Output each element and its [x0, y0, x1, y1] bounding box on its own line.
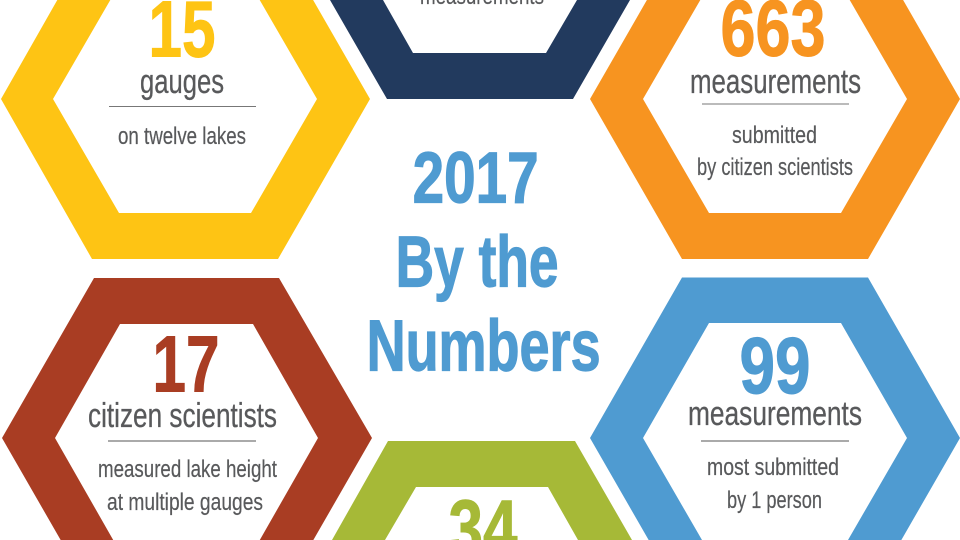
description: most submitted by 1 person: most submitted	[707, 454, 839, 481]
hexagon ring: blue	[590, 278, 960, 540]
title: 2017 By the Numbers	[367, 138, 601, 386]
divider line	[108, 440, 256, 442]
panel: gauges hexagon	[1, 0, 370, 259]
hexagon ring: brown	[2, 278, 372, 540]
title: 2017 By the Numbers: Numbers	[367, 306, 601, 386]
unit: measurements: measurements	[690, 63, 861, 101]
description: submitted by citizen scientists	[697, 122, 853, 181]
panel: citizen scientists hexagon	[2, 278, 372, 540]
number: 99: 99	[740, 321, 810, 410]
description: measured lake height at multiple gauges: measured lake height	[98, 456, 277, 483]
description: measured lake height at multiple gauges: at multiple gauges	[107, 489, 263, 516]
divider line	[109, 106, 256, 107]
panel: navy hexagon (cropped)	[330, 0, 630, 99]
hexagon ring: orange	[590, 0, 960, 259]
unit: gauges: gauges	[140, 63, 224, 101]
divider line	[701, 440, 849, 442]
description: submitted by citizen scientists: submitted	[732, 122, 817, 149]
hexagon ring: green	[332, 441, 632, 540]
unit: citizen scientists: citizen scientists	[88, 397, 277, 435]
description: on twelve lakes: on twelve lakes	[118, 123, 246, 150]
unit: measurements: measurements	[688, 395, 862, 433]
title: 2017 By the Numbers: By the	[396, 222, 559, 302]
number: 17: 17	[152, 320, 220, 408]
description: most submitted by 1 person	[707, 454, 839, 514]
description: submitted by citizen scientists: by citizen scientists	[697, 154, 853, 181]
title: 2017 By the Numbers: 2017	[413, 138, 539, 218]
hexagon ring: navy	[330, 0, 630, 99]
panel: green hexagon (cropped)	[332, 441, 632, 540]
divider line	[702, 104, 849, 105]
panel: submitted measurements hexagon	[590, 0, 960, 259]
description: measured lake height at multiple gauges	[98, 456, 277, 516]
description: most submitted by 1 person: by 1 person	[727, 487, 822, 514]
panel: most submitted hexagon	[590, 278, 960, 540]
hexagon ring: yellow	[1, 0, 370, 259]
